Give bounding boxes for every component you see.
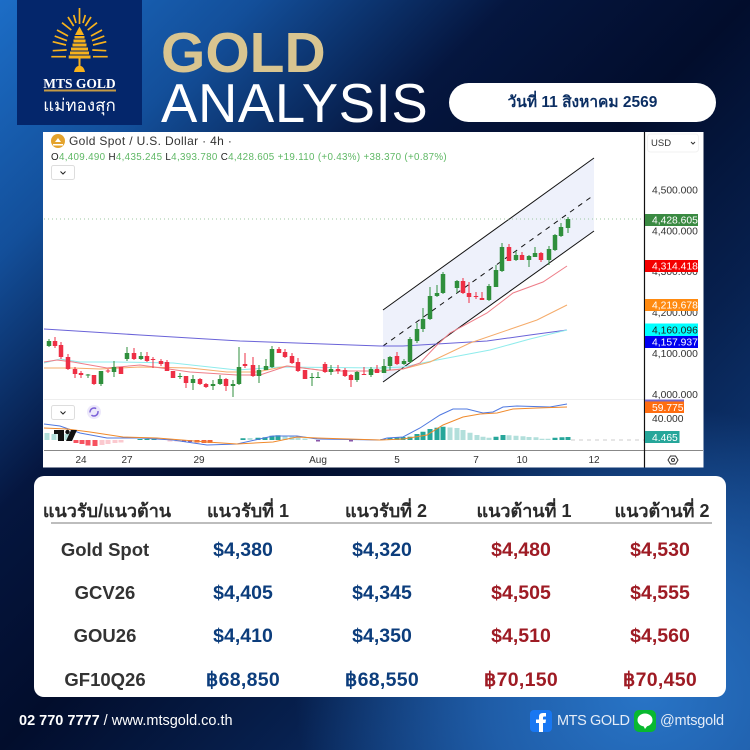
row: GF10Q26: ฿68,850 bbox=[206, 669, 280, 691]
price axis labels: 4,500.000 bbox=[652, 186, 698, 196]
price tags: 4.465 bbox=[652, 433, 678, 444]
row: GCV26: $4,555 bbox=[630, 582, 690, 604]
icon: TradingView logo bbox=[54, 430, 77, 441]
icon: LINE bbox=[634, 710, 656, 732]
price axis labels bbox=[652, 186, 698, 425]
levels table panel bbox=[34, 476, 726, 697]
moving averages bbox=[44, 266, 567, 375]
table header: resistance 1: แนวต้านที่ 1 bbox=[476, 501, 572, 521]
time axis labels: Aug bbox=[309, 455, 327, 466]
row: GOU26: $4,560 bbox=[630, 625, 690, 647]
table header: support 1: แนวรับที่ 1 bbox=[207, 501, 289, 521]
currency selector bbox=[648, 134, 698, 152]
price tags bbox=[645, 214, 698, 444]
row: GCV26: GCV26 bbox=[75, 582, 135, 603]
row: Gold Spot: $4,530 bbox=[630, 539, 690, 561]
row: GOU26: GOU26 bbox=[74, 625, 136, 646]
time axis labels: 29 bbox=[193, 455, 205, 466]
title: ANALYSIS: ANALYSIS bbox=[161, 73, 428, 134]
time axis labels: 10 bbox=[516, 455, 528, 466]
facebook handle: MTS GOLD bbox=[557, 713, 630, 729]
price channel bbox=[383, 158, 594, 382]
row: Gold Spot: $4,320 bbox=[352, 539, 412, 561]
title: GOLD: GOLD bbox=[161, 21, 326, 85]
row: Gold Spot bbox=[61, 539, 690, 561]
time axis labels: 27 bbox=[121, 455, 133, 466]
row: GCV26: $4,345 bbox=[352, 582, 412, 604]
time axis labels: 7 bbox=[473, 455, 479, 466]
chart header: OHLC values: O4,409.490 H4,435.245 L4,393.780 C4,428.605 +19.110 (+0.43%) +38.370 (+0.87%) bbox=[51, 152, 447, 163]
price tags: 4,219.678 bbox=[652, 300, 698, 312]
LINE handle: @mtsgold bbox=[660, 713, 724, 729]
price axis labels: 40.000 bbox=[652, 414, 684, 425]
icon: facebook bbox=[530, 710, 552, 732]
time axis labels: 12 bbox=[588, 455, 600, 466]
time axis labels: 5 bbox=[394, 455, 400, 466]
time axis labels: 24 bbox=[75, 455, 87, 466]
price axis labels: 4,000.000 bbox=[652, 390, 698, 401]
time axis labels bbox=[75, 455, 600, 466]
row: Gold Spot: Gold Spot bbox=[61, 539, 149, 560]
chart header: symbol title: Gold Spot / U.S. Dollar · 4h · bbox=[69, 134, 232, 148]
candlesticks: bullish bbox=[49, 217, 568, 397]
row: GCV26: $4,405 bbox=[213, 582, 273, 604]
price tags: 4,314.418 bbox=[652, 262, 698, 272]
icon: settings bbox=[668, 456, 678, 464]
table header: resistance 2: แนวต้านที่ 2 bbox=[614, 501, 710, 521]
price axis labels: 4,100.000 bbox=[652, 349, 698, 360]
date pill: วันที่ 11 สิงหาคม 2569 bbox=[508, 94, 657, 111]
row: GOU26: $4,350 bbox=[352, 625, 412, 647]
price tags: 4,157.937 bbox=[652, 338, 698, 348]
price tags: 59.775 bbox=[652, 403, 684, 414]
row: GOU26 bbox=[74, 625, 690, 647]
row: GOU26: $4,410 bbox=[213, 625, 273, 647]
MACD signal lines bbox=[44, 404, 567, 445]
row: Gold Spot: $4,380 bbox=[213, 539, 273, 561]
logo wordmark: MTS GOLD bbox=[43, 76, 116, 91]
indicator pane controls bbox=[52, 405, 101, 420]
table header divider bbox=[51, 522, 712, 524]
logo Thai name: แม่ทองสุก bbox=[43, 96, 116, 116]
date pill bbox=[449, 83, 716, 122]
icon: golden pagoda with rays bbox=[51, 8, 108, 72]
price axis labels: 4,200.000 bbox=[652, 308, 698, 319]
footer contact: 02 770 7777 / www.mtsgold.co.th bbox=[19, 713, 233, 729]
row: GOU26: $4,510 bbox=[491, 625, 551, 647]
row: GF10Q26: ฿68,550 bbox=[345, 669, 419, 691]
price axis labels: 4,300.000 bbox=[652, 267, 698, 278]
row: GF10Q26: ฿70,450 bbox=[623, 669, 697, 691]
MACD histogram bbox=[47, 427, 568, 446]
table header: support 2: แนวรับที่ 2 bbox=[345, 501, 427, 521]
candlesticks: bearish bbox=[55, 244, 541, 391]
price axis labels: 4,400.000 bbox=[652, 226, 698, 238]
row: GCV26 bbox=[75, 582, 690, 604]
price tags: 4,160.096 bbox=[652, 326, 698, 336]
logo panel bbox=[17, 0, 142, 125]
currency selector: USD bbox=[651, 138, 671, 149]
row: GF10Q26: ฿70,150 bbox=[484, 669, 558, 691]
row: GF10Q26 bbox=[64, 669, 697, 691]
price tags: 4,428.605 bbox=[652, 216, 698, 226]
row: GF10Q26: GF10Q26 bbox=[64, 669, 146, 690]
row: Gold Spot: $4,480 bbox=[491, 539, 551, 561]
dropdown button bbox=[52, 166, 74, 180]
row: GCV26: $4,505 bbox=[491, 582, 551, 604]
table header: row title: แนวรับ/แนวต้าน bbox=[43, 501, 171, 521]
